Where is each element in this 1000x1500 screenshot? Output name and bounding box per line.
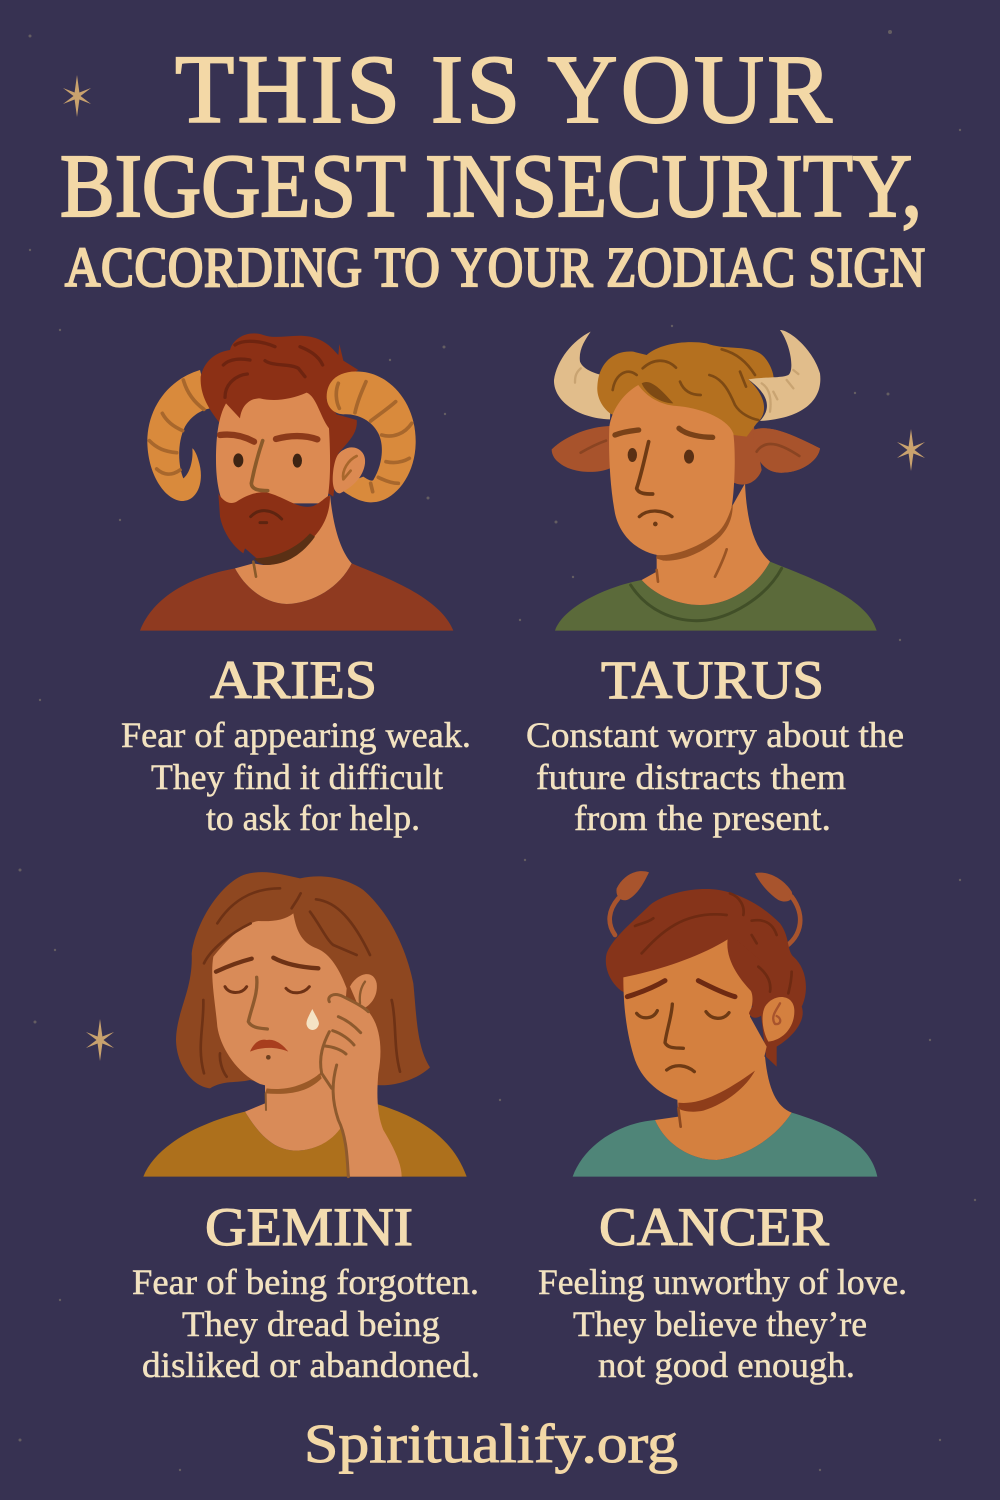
text: Taurus description <box>526 715 904 838</box>
title <box>60 36 925 299</box>
portrait: Cancer man with crab antennae <box>573 871 877 1177</box>
text: Cancer description: They believe they’re <box>573 1304 867 1344</box>
portrait: Aries man with ram horns <box>140 333 453 631</box>
panel: Cancer <box>538 871 907 1385</box>
panel: Gemini <box>132 872 480 1385</box>
icon: sparkle star left <box>86 1019 114 1061</box>
text: Cancer description: Feeling unworthy of love. <box>538 1262 907 1302</box>
text: Gemini description: disliked or abandoned. <box>142 1345 480 1385</box>
name: Taurus: TAURUS <box>601 650 824 710</box>
panel: Aries <box>121 333 471 838</box>
text: Gemini description: They dread being <box>182 1304 440 1344</box>
text: Cancer description: not good enough. <box>598 1345 855 1385</box>
icon: sparkle star top left <box>63 75 91 117</box>
portrait: Gemini woman wiping a tear <box>143 872 467 1177</box>
text: Aries description: Fear of appearing weak. <box>121 715 471 755</box>
name: Aries: ARIES <box>210 650 377 710</box>
name: Cancer: CANCER <box>599 1197 829 1257</box>
panel: Taurus <box>526 330 904 838</box>
text: Taurus description: Constant worry about the <box>526 715 904 755</box>
icon: sparkle star right <box>897 429 925 471</box>
footer: website: Spiritualify.org <box>304 1413 678 1474</box>
title: ACCORDING TO YOUR ZODIAC SIGN <box>65 237 925 299</box>
portrait: Taurus man with bull horns <box>552 330 877 631</box>
title: THIS IS YOUR <box>175 36 832 143</box>
text: Cancer description <box>538 1262 907 1385</box>
text: Taurus description: from the present. <box>574 798 831 838</box>
name: Gemini: GEMINI <box>205 1197 413 1257</box>
text: Taurus description: future distracts them <box>536 757 846 797</box>
text: Gemini description <box>132 1262 480 1385</box>
text: Aries description <box>121 715 471 838</box>
text: Aries description: to ask for help. <box>206 798 420 838</box>
text: Aries description: They find it difficult <box>151 757 443 797</box>
text: Gemini description: Fear of being forgotten. <box>132 1262 479 1302</box>
title: BIGGEST INSECURITY, <box>60 135 922 236</box>
